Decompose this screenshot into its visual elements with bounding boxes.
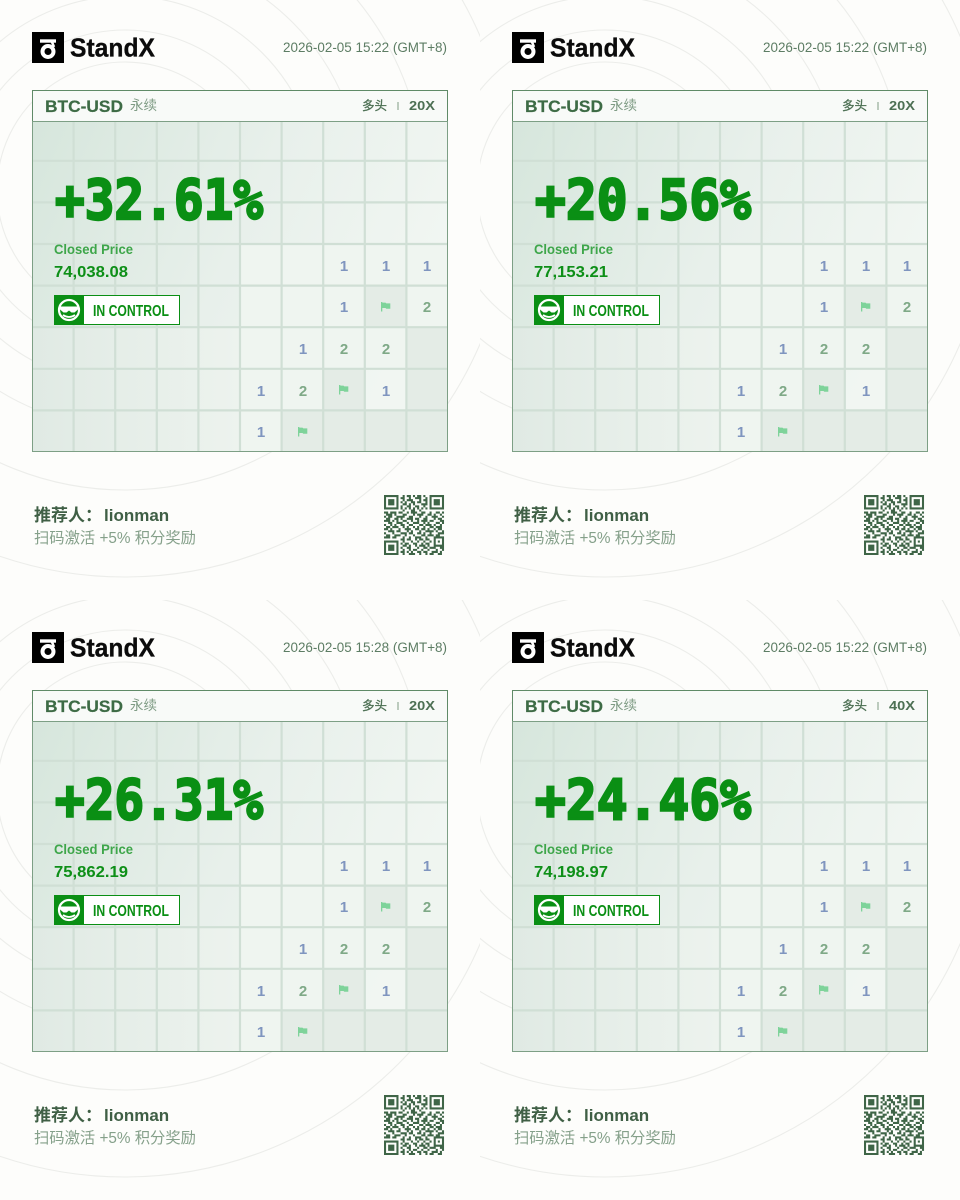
minesweeper numbers and flags: 1 bbox=[257, 983, 265, 1000]
header bar bbox=[512, 90, 928, 122]
header bar: 永续 bbox=[610, 698, 637, 713]
badge: in control: IN CONTROL bbox=[93, 303, 169, 320]
panel: card 4 bbox=[480, 600, 960, 1178]
percentage: +24.46% bbox=[535, 768, 751, 832]
minesweeper numbers and flags: 2 bbox=[820, 941, 828, 958]
panel: trade board bbox=[512, 690, 928, 1052]
minesweeper numbers and flags: 1 bbox=[862, 858, 870, 875]
timestamp: 2026-02-05 15:22 (GMT+8) bbox=[283, 40, 447, 55]
percentage: +32.61% bbox=[55, 168, 263, 232]
background rings bbox=[0, 0, 512, 577]
logo bbox=[32, 632, 156, 663]
closed price value: 77,153.21 bbox=[534, 264, 608, 281]
logo bbox=[512, 632, 636, 663]
header bar bbox=[512, 690, 928, 722]
minesweeper numbers and flags: 1 bbox=[257, 1024, 265, 1041]
minesweeper numbers and flags: 2 bbox=[423, 899, 431, 916]
minesweeper numbers and flags: 2 bbox=[779, 983, 787, 1000]
minesweeper numbers and flags: 1 bbox=[862, 983, 870, 1000]
minesweeper numbers and flags: 1 bbox=[779, 341, 787, 358]
badge: in control: IN CONTROL bbox=[573, 903, 649, 920]
minesweeper numbers and flags: 1 bbox=[340, 299, 348, 316]
panel: card 2 bbox=[480, 0, 960, 578]
minesweeper numbers and flags: 1 bbox=[903, 258, 911, 275]
minesweeper numbers and flags: 2 bbox=[903, 299, 911, 316]
badge: in control bbox=[54, 895, 180, 925]
minesweeper numbers and flags bbox=[737, 258, 911, 441]
header bar: BTC-USD bbox=[45, 697, 123, 716]
header bar: 永续 bbox=[130, 698, 157, 713]
header bar: 20X bbox=[409, 99, 436, 113]
logo bbox=[512, 32, 636, 63]
minesweeper numbers and flags: 1 bbox=[299, 341, 307, 358]
minesweeper numbers and flags: 2 bbox=[340, 341, 348, 358]
minesweeper numbers and flags bbox=[737, 858, 911, 1041]
timestamp: 2026-02-05 15:28 (GMT+8) bbox=[283, 640, 447, 655]
minesweeper numbers and flags: 1 bbox=[862, 383, 870, 400]
logo: StandX bbox=[70, 32, 156, 62]
logo: StandX bbox=[550, 632, 636, 662]
panel: trade board bbox=[32, 690, 448, 1052]
header bar: BTC-USD bbox=[525, 697, 603, 716]
closed price label: Closed Price bbox=[534, 241, 613, 257]
minesweeper numbers and flags: 2 bbox=[820, 341, 828, 358]
minesweeper numbers and flags: 1 bbox=[257, 424, 265, 441]
minesweeper numbers and flags: 2 bbox=[862, 341, 870, 358]
header bar: 多头 bbox=[362, 99, 387, 113]
referrer: 推荐人：lionman bbox=[34, 506, 169, 525]
minesweeper numbers and flags: 1 bbox=[423, 858, 431, 875]
minesweeper numbers and flags: 1 bbox=[340, 858, 348, 875]
badge: in control: IN CONTROL bbox=[573, 303, 649, 320]
header bar: 永续 bbox=[130, 98, 157, 113]
minesweeper numbers and flags: 2 bbox=[862, 941, 870, 958]
header bar: 永续 bbox=[610, 98, 637, 113]
header bar: 多头 bbox=[362, 699, 387, 713]
minesweeper numbers and flags bbox=[257, 258, 431, 441]
badge: in control bbox=[534, 295, 660, 325]
minesweeper numbers and flags: 1 bbox=[820, 858, 828, 875]
minesweeper numbers and flags: 1 bbox=[779, 941, 787, 958]
timestamp: 2026-02-05 15:22 (GMT+8) bbox=[763, 640, 927, 655]
minesweeper numbers and flags: 2 bbox=[779, 383, 787, 400]
minesweeper numbers and flags: 2 bbox=[340, 941, 348, 958]
referrer: 推荐人：lionman bbox=[514, 506, 649, 525]
badge: in control bbox=[534, 895, 660, 925]
header bar: BTC-USD bbox=[525, 97, 603, 116]
logo: StandX bbox=[550, 32, 636, 62]
closed price value: 74,198.97 bbox=[534, 864, 608, 881]
QR code bbox=[864, 495, 924, 555]
minesweeper numbers and flags: 1 bbox=[820, 299, 828, 316]
header bar: 40X bbox=[889, 699, 916, 713]
percentage: +20.56% bbox=[535, 168, 751, 232]
minesweeper numbers and flags: 1 bbox=[340, 899, 348, 916]
QR code bbox=[864, 1095, 924, 1155]
background rings bbox=[218, 403, 960, 1177]
minesweeper numbers and flags: 1 bbox=[820, 899, 828, 916]
minesweeper numbers and flags: 1 bbox=[737, 983, 745, 1000]
panel: card 1 bbox=[0, 0, 480, 578]
game grid bbox=[32, 122, 448, 452]
minesweeper numbers and flags: 1 bbox=[903, 858, 911, 875]
minesweeper numbers and flags: 1 bbox=[737, 424, 745, 441]
panel: trade board bbox=[512, 90, 928, 452]
header bar bbox=[32, 90, 448, 122]
header bar: 20X bbox=[409, 699, 436, 713]
header bar: 多头 bbox=[842, 699, 867, 713]
minesweeper numbers and flags: 1 bbox=[382, 383, 390, 400]
badge: in control: IN CONTROL bbox=[93, 903, 169, 920]
minesweeper numbers and flags: 2 bbox=[423, 299, 431, 316]
closed price value: 74,038.08 bbox=[54, 264, 128, 281]
logo bbox=[32, 32, 156, 63]
closed price value: 75,862.19 bbox=[54, 864, 128, 881]
badge: in control bbox=[54, 295, 180, 325]
game grid bbox=[512, 122, 928, 452]
header bar: 20X bbox=[889, 99, 916, 113]
minesweeper numbers and flags bbox=[257, 858, 431, 1041]
minesweeper numbers and flags: 2 bbox=[299, 383, 307, 400]
logo: StandX bbox=[70, 632, 156, 662]
panel: card 3 bbox=[0, 600, 480, 1178]
minesweeper numbers and flags: 1 bbox=[737, 1024, 745, 1041]
minesweeper numbers and flags: 1 bbox=[862, 258, 870, 275]
referral note: 扫码激活 +5% 积分奖励 bbox=[34, 530, 196, 547]
QR code bbox=[384, 495, 444, 555]
timestamp: 2026-02-05 15:22 (GMT+8) bbox=[763, 40, 927, 55]
minesweeper numbers and flags: 1 bbox=[382, 983, 390, 1000]
background rings bbox=[218, 0, 960, 577]
QR code bbox=[384, 1095, 444, 1155]
header bar bbox=[32, 690, 448, 722]
minesweeper numbers and flags: 1 bbox=[382, 858, 390, 875]
referral note: 扫码激活 +5% 积分奖励 bbox=[514, 1130, 676, 1147]
minesweeper numbers and flags: 1 bbox=[423, 258, 431, 275]
minesweeper numbers and flags: 1 bbox=[257, 383, 265, 400]
panel: trade board bbox=[32, 90, 448, 452]
referrer: 推荐人：lionman bbox=[34, 1106, 169, 1125]
background rings bbox=[0, 403, 512, 1177]
game grid bbox=[32, 722, 448, 1052]
percentage: +26.31% bbox=[55, 768, 263, 832]
closed price label: Closed Price bbox=[54, 241, 133, 257]
header bar: BTC-USD bbox=[45, 97, 123, 116]
referrer: 推荐人：lionman bbox=[514, 1106, 649, 1125]
closed price label: Closed Price bbox=[534, 841, 613, 857]
minesweeper numbers and flags: 1 bbox=[737, 383, 745, 400]
minesweeper numbers and flags: 2 bbox=[382, 941, 390, 958]
minesweeper numbers and flags: 2 bbox=[382, 341, 390, 358]
closed price label: Closed Price bbox=[54, 841, 133, 857]
minesweeper numbers and flags: 1 bbox=[820, 258, 828, 275]
header bar: 多头 bbox=[842, 99, 867, 113]
referral note: 扫码激活 +5% 积分奖励 bbox=[514, 530, 676, 547]
minesweeper numbers and flags: 1 bbox=[340, 258, 348, 275]
minesweeper numbers and flags: 2 bbox=[903, 899, 911, 916]
game grid bbox=[512, 722, 928, 1052]
minesweeper numbers and flags: 2 bbox=[299, 983, 307, 1000]
referral note: 扫码激活 +5% 积分奖励 bbox=[34, 1130, 196, 1147]
minesweeper numbers and flags: 1 bbox=[382, 258, 390, 275]
minesweeper numbers and flags: 1 bbox=[299, 941, 307, 958]
